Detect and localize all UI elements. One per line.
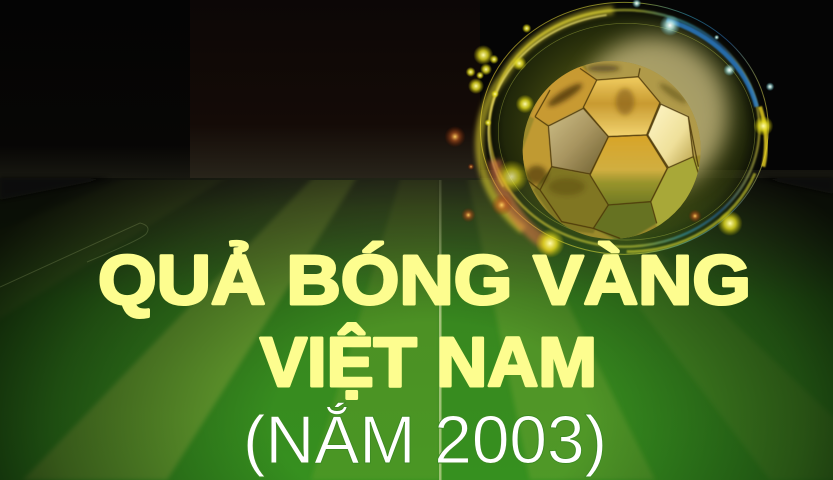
ball seams (527, 68, 698, 238)
olive inner glow (483, 3, 766, 253)
halo behind ball (578, 37, 728, 190)
dark corner above right touchline (760, 178, 833, 194)
ball panels (522, 61, 700, 239)
pitch centre line (439, 180, 442, 480)
title line 2: VIỆT NAM (260, 322, 597, 401)
dark corner above left touchline (0, 178, 110, 200)
title (98, 241, 751, 478)
penalty arc (0, 223, 148, 287)
sparkles (444, 0, 774, 258)
ball (522, 61, 701, 239)
ball shadows (526, 65, 689, 195)
title line 1: QUẢ BÓNG VÀNG (98, 241, 751, 319)
football pitch with mown stripes (0, 178, 833, 480)
golden ball emblem (444, 0, 774, 258)
light rings (479, 2, 768, 254)
subtitle: year: (NẮM 2003) (243, 401, 607, 478)
stadium dark background (0, 0, 833, 182)
